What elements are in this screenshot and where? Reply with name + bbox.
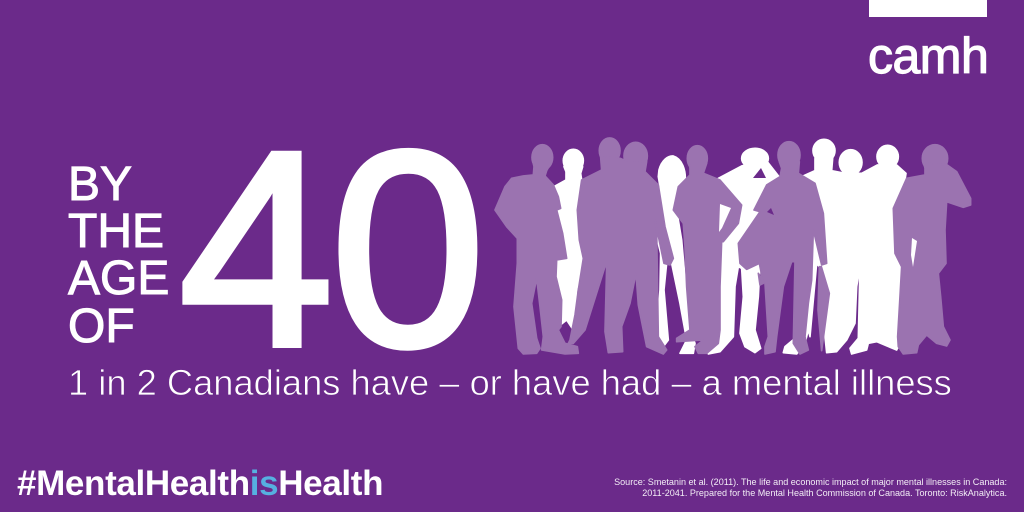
heading: by the age of: AGE [68, 252, 169, 305]
figure gaps [719, 168, 917, 267]
source citation: 2011-2041. Prepared for the Mental Health Commission of Canada. Toronto: RiskAnalytica. [642, 488, 1007, 498]
source citation [614, 477, 1007, 498]
white figures [554, 139, 906, 354]
hashtag: #MentalHealthisHealth [17, 464, 383, 503]
logo: camh: camh [868, 28, 988, 84]
heading: by the age of: BY [68, 158, 132, 210]
light purple figures [495, 138, 971, 354]
heading: by the age of: THE [68, 205, 164, 258]
heading: by the age of [67, 158, 169, 353]
big number 40: 40 [179, 93, 482, 404]
logo tab [869, 0, 987, 17]
source citation: Source: Smetanin et al. (2011). The life and economic impact of major mental illnesses in Canada: [614, 477, 1007, 487]
heading: by the age of: OF [68, 300, 135, 353]
tagline: 1 in 2 Canadians have – or have had – a mental illness [68, 362, 952, 403]
